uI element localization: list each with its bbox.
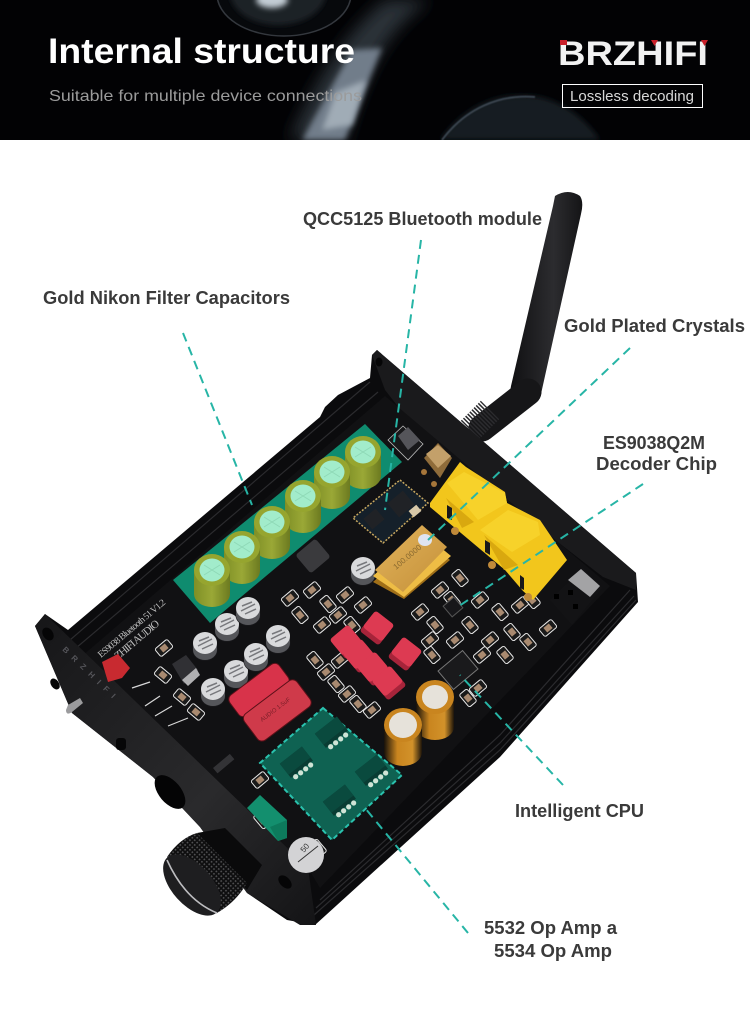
toggle switch (66, 698, 83, 714)
slide switch (213, 754, 234, 773)
green block capacitor (247, 795, 287, 841)
header banner (0, 0, 750, 140)
gold plated crystal (373, 525, 451, 599)
USB-C port (388, 426, 423, 460)
board silkscreen text: ES9038 Bluetooth 51 V1.2 (97, 598, 168, 660)
inductor (295, 538, 331, 574)
tag: lossless decoding (562, 84, 702, 108)
jumper wires (132, 682, 188, 726)
silver electrolytic capacitors (192, 557, 376, 707)
panel opening (149, 770, 191, 814)
subtitle: Suitable for multiple device connections (49, 88, 362, 105)
orange electrolytic capacitors (384, 680, 454, 766)
panel brand text: BRZHIFI (61, 645, 117, 700)
pads and resistors (154, 569, 557, 857)
logo BRZHIFI (560, 40, 708, 65)
leader: op amps (365, 808, 468, 933)
gold coaxial jack (421, 443, 452, 487)
large red film capacitors (226, 661, 314, 743)
panel screw holes (40, 625, 294, 891)
yellow connector block (430, 462, 567, 601)
label: decoder chip (596, 433, 717, 474)
label: gold plated crystals: Gold Plated Crystals (564, 316, 745, 336)
back panel (372, 350, 636, 590)
large red film capacitors: AUDIO 1.5uF (260, 697, 292, 724)
label: CPU: Intelligent CPU (515, 801, 644, 821)
decoder chip (443, 597, 463, 617)
title: Internal structure (48, 32, 355, 71)
silver sticker (288, 837, 324, 873)
optical port (550, 568, 602, 625)
label: filter capacitors: Gold Nikon Filter Capacitors (43, 288, 290, 308)
intelligent CPU chip (438, 651, 478, 689)
board silkscreen text: ZHIFI AUDIO (112, 618, 162, 662)
volume knob (152, 828, 262, 926)
small red capacitors (329, 610, 422, 701)
tag: lossless decoding: Lossless decoding (570, 89, 694, 105)
green overlay: op amps (260, 708, 402, 840)
dashed leader lines (183, 240, 643, 933)
panel button (116, 738, 126, 750)
leader: CPU (460, 675, 563, 785)
side wall rails (70, 382, 636, 915)
device body (35, 350, 638, 925)
leader: Bluetooth module (385, 240, 421, 510)
label: op amps: 5532 Op Amp a (484, 918, 618, 938)
label: op amps: 5534 Op Amp (494, 941, 612, 961)
red switch block (102, 654, 130, 682)
leader: filter capacitors (183, 333, 252, 505)
green overlay: filter capacitors (173, 424, 402, 623)
label: Bluetooth module: QCC5125 Bluetooth module (303, 209, 542, 229)
gold plated crystal: 100.0000 (392, 542, 424, 572)
regulator chip (172, 655, 200, 686)
front panel (35, 614, 316, 925)
label: op amps (484, 918, 618, 961)
leader: decoder chip (456, 484, 643, 608)
Bluetooth module (353, 480, 428, 543)
circuit board (82, 396, 610, 888)
antenna (470, 192, 582, 430)
label: decoder chip: ES9038Q2M (603, 433, 705, 453)
banner photo: speaker shapes (217, 0, 600, 140)
leader: crystals (428, 348, 630, 540)
logo BRZHIFI: BRZHIFI (558, 35, 708, 73)
silver sticker: 50 (299, 841, 312, 854)
label: decoder chip: Decoder Chip (596, 454, 717, 474)
